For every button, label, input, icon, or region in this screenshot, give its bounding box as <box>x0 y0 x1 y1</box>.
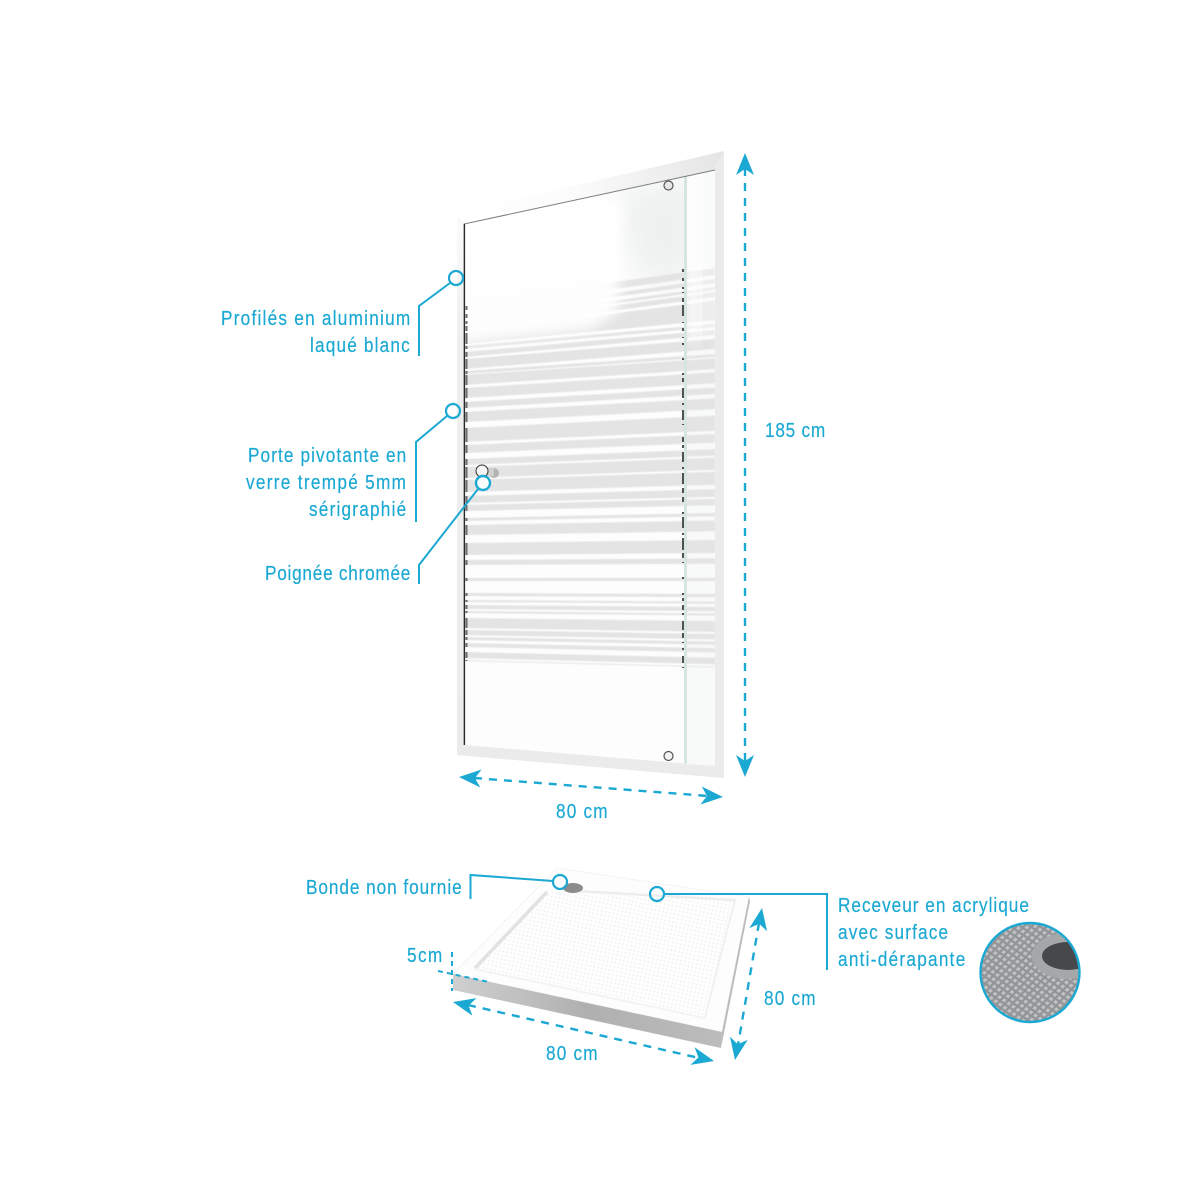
fixed side panel <box>687 170 715 770</box>
callout: door <box>246 404 460 522</box>
top hinge <box>664 181 673 190</box>
drain hole <box>563 883 583 893</box>
callout: acrylic tray: Receveur en acrylique <box>838 894 1029 916</box>
dimension: door height: 185 cm <box>765 419 825 441</box>
serigraphy stripes <box>464 268 715 668</box>
left edge marks <box>466 306 468 661</box>
callout: acrylic tray: anti-dérapante <box>838 948 965 970</box>
glass panel <box>440 170 715 770</box>
glass outline <box>464 170 715 745</box>
shower door <box>440 151 724 778</box>
glass reflection <box>629 186 684 274</box>
dimension: door height <box>736 153 825 777</box>
callout: door: verre trempé 5mm <box>246 471 406 493</box>
infographic canvas <box>222 151 1081 1065</box>
dimension: tray front width: 80 cm <box>546 1042 598 1064</box>
tray side face <box>721 897 750 1048</box>
chrome handle <box>476 465 499 478</box>
callout: profiles: Profilés en aluminium <box>221 307 410 329</box>
divider edge marks <box>682 269 684 668</box>
dimension: tray front width <box>451 993 716 1070</box>
panel divider <box>684 170 687 770</box>
basin <box>475 892 735 1017</box>
dimension: tray height <box>407 944 489 991</box>
tray top <box>453 868 749 1032</box>
dimension: tray height: 5cm <box>407 944 442 966</box>
shower tray <box>453 868 750 1048</box>
callout: handle: Poignée chromée <box>265 562 410 584</box>
callout: acrylic tray <box>650 887 1029 970</box>
callout: acrylic tray: avec surface <box>838 921 948 943</box>
basin shading <box>475 891 735 1018</box>
inset: anti-slip surface detail <box>979 922 1081 1024</box>
callout: door: Porte pivotante en <box>248 444 406 466</box>
white haze over upper stripes <box>465 282 622 344</box>
door frame <box>457 151 724 778</box>
bottom hinge <box>664 752 673 760</box>
callout: drain: Bonde non fournie <box>306 876 462 898</box>
dimension: tray depth <box>726 906 816 1062</box>
callout: handle <box>265 476 490 584</box>
callout: profiles <box>221 271 463 356</box>
callout: drain <box>306 875 567 899</box>
dimension: door width <box>458 768 724 822</box>
callout: profiles: laqué blanc <box>310 334 410 356</box>
callout: door: sérigraphié <box>309 498 406 520</box>
dimension: tray depth: 80 cm <box>764 987 816 1009</box>
dimension: door width: 80 cm <box>556 800 608 822</box>
tray front face <box>453 974 722 1048</box>
